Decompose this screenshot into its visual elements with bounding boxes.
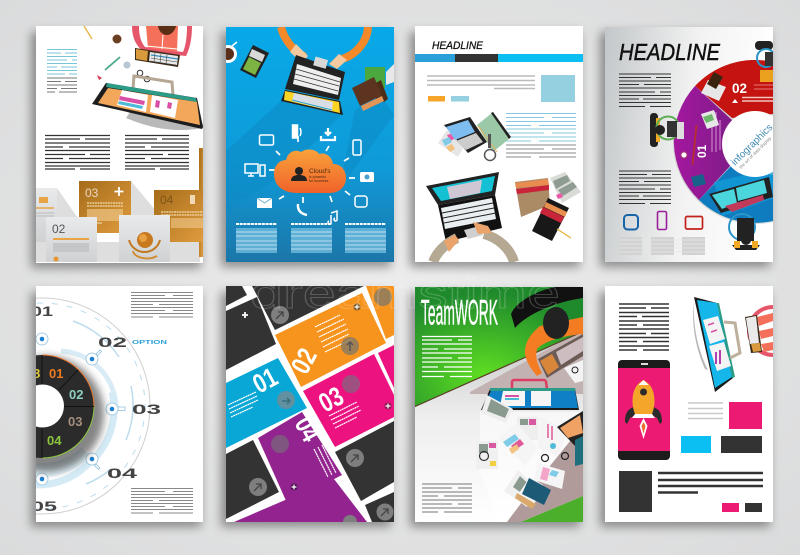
illustration: chart card in purple	[701, 110, 719, 129]
icon group: service icons around the cloud	[245, 125, 374, 224]
text block: column 3	[345, 224, 386, 253]
icon: phone in purple	[691, 174, 706, 187]
white centre with label: infographics	[729, 122, 775, 168]
heading: option labels	[31, 303, 161, 514]
text block: blue lines	[506, 114, 576, 141]
label: 02: 02	[732, 81, 747, 96]
illustration: person top right	[755, 41, 775, 82]
illustration: tablet	[481, 380, 579, 410]
tile: blue 01	[226, 358, 307, 448]
icon: coffee	[681, 152, 687, 158]
block: dark	[721, 436, 762, 453]
text block: grey columns	[619, 237, 705, 255]
label: 02	[732, 81, 773, 103]
band	[415, 54, 583, 62]
illustration: tablet	[92, 76, 203, 130]
icon: tablet red	[686, 216, 702, 229]
white centre with label: the art of data display	[738, 135, 773, 170]
text block: black lines	[619, 304, 669, 350]
long shadow	[226, 98, 394, 176]
illustration: tablet	[693, 297, 735, 392]
icon: books	[352, 64, 394, 111]
soft paper shadows	[480, 412, 580, 522]
card: 03: 03	[85, 186, 99, 200]
text block: top	[131, 292, 193, 317]
text block: grey lines	[688, 403, 723, 418]
heading: HEADLINE	[619, 39, 720, 65]
card: 02: 02	[52, 222, 66, 236]
illustration: cloud with text: Cloud's	[309, 168, 331, 175]
white centre with label	[722, 111, 788, 177]
tile: purple 04: 04	[288, 412, 326, 447]
icon: arrows on dark tiles	[249, 306, 394, 529]
chart: dark wheel with numbers: 02	[69, 387, 83, 402]
card: 02	[46, 217, 97, 262]
card: 04: 04	[160, 193, 174, 207]
heading: option labels: 02	[98, 334, 127, 350]
panel: flyer 3 headline with laptop	[415, 26, 583, 262]
text block: grey intro	[47, 78, 77, 92]
desk area upper	[470, 330, 583, 394]
illustration: cloud with text: for business	[309, 179, 329, 183]
desk area lower right	[507, 425, 583, 522]
card: 03	[79, 181, 131, 233]
tile: pink 03	[303, 345, 394, 447]
illustration: arms and laptop	[281, 27, 368, 115]
card shadows	[36, 181, 200, 262]
illustration: cloud with text	[274, 150, 346, 193]
button: orange	[428, 96, 445, 102]
illustration: person	[745, 305, 799, 357]
dark tiles	[226, 286, 394, 522]
chart: dark wheel with numbers: 8	[33, 366, 40, 381]
panel: flyer 5 radial options	[0, 286, 203, 522]
chart: dark wheel with numbers	[0, 355, 104, 472]
heading: option labels: 03	[132, 401, 161, 417]
panel: flyer 1 workspace and option cards	[36, 26, 203, 263]
illustration: person with keyboard	[511, 284, 583, 383]
button: dark	[745, 503, 762, 512]
button: blue	[451, 96, 469, 102]
icon: tablet blue	[624, 215, 638, 230]
icon: red pencil	[690, 125, 699, 165]
panel: flyer 7 teamwork: TeamWORK	[421, 294, 498, 332]
text block: grey lines 2	[506, 145, 576, 157]
illustration: monitor in blue segment	[709, 177, 773, 213]
chart: dark wheel with numbers: 04	[47, 433, 62, 448]
illustration: cloud with text: is powerful	[309, 175, 326, 179]
text block: column left	[45, 136, 110, 169]
tile: blue 01: 01	[248, 362, 283, 400]
panel: flyer 7 teamwork	[415, 284, 583, 522]
illustration: person at keyboard	[132, 26, 192, 67]
card: globe	[119, 215, 170, 262]
panel: flyer 8 rocket phone	[605, 286, 799, 522]
strip: gold	[199, 148, 203, 257]
text block: upper	[619, 74, 671, 106]
panel: flyer 2 cloud services	[219, 27, 394, 262]
illustration: person bottom	[729, 214, 760, 250]
tile: purple bottom	[234, 479, 367, 522]
chart: infographic wheel	[673, 60, 800, 224]
text block: column right	[125, 136, 189, 169]
watermark: dreamstime	[250, 269, 560, 318]
heading: HEADLINE	[432, 40, 484, 52]
icon: coffee cup	[226, 41, 238, 63]
label: 01: 01	[695, 144, 709, 158]
illustration: scattered documents	[476, 395, 583, 509]
icon: markers	[36, 333, 125, 485]
text block: column 2	[291, 224, 332, 253]
tile: orange 02	[275, 286, 394, 387]
chart: dark wheel with numbers: 03	[68, 414, 82, 429]
tile: orange 02: 02	[286, 344, 323, 379]
illustration: notebooks	[515, 172, 581, 241]
chart: dark wheel with numbers: 01	[49, 366, 63, 381]
text block: grey lines	[422, 484, 472, 512]
illustration: phone with rocket	[618, 360, 670, 460]
illustration: person left	[650, 113, 684, 147]
icon: desk items	[84, 26, 150, 82]
text block: bold lines	[658, 473, 763, 492]
icon: tablet handle	[724, 322, 740, 358]
icon: plus on dark tile	[242, 312, 248, 318]
text block: bottom	[131, 488, 193, 513]
heading: option labels: 05	[31, 498, 57, 514]
tile: pink 03: 03	[314, 381, 349, 419]
segment: red 02	[695, 60, 773, 118]
illustration: tablet, notebook, magnifier	[438, 112, 511, 160]
block: pink	[729, 402, 762, 429]
heading: option labels: 04	[107, 465, 137, 481]
segment: blue 04	[699, 166, 773, 223]
text block: column 1	[236, 224, 277, 253]
block: image placeholder	[619, 471, 652, 512]
tile: purple 04	[258, 412, 342, 503]
illustration: laptop with hands	[426, 172, 514, 262]
card: grey top left	[36, 188, 57, 242]
block: cyan	[681, 436, 711, 453]
heading: option labels: 01	[31, 303, 53, 319]
panel: flyer 6 diagonal tiles	[226, 286, 394, 529]
text block: lower	[619, 171, 671, 204]
panel: flyer 4 headline with infographic wheel	[605, 27, 773, 262]
button: pink	[722, 503, 739, 512]
label: 04: 4	[770, 188, 782, 195]
label: 01	[695, 112, 720, 158]
text block: grey lines	[427, 76, 535, 88]
label: option: OPTION	[132, 340, 167, 346]
green corner	[521, 496, 583, 522]
text block: white lines	[422, 336, 472, 376]
green background	[415, 287, 583, 407]
illustration: document in red segment	[701, 72, 726, 101]
card: 04	[154, 190, 203, 242]
icon: phone purple	[658, 212, 666, 230]
chart: radial rings	[0, 298, 150, 514]
image placeholder	[541, 75, 575, 102]
icon: smartphone	[240, 45, 269, 78]
segment: purple 01	[674, 86, 732, 200]
text block: blue intro	[47, 50, 77, 74]
